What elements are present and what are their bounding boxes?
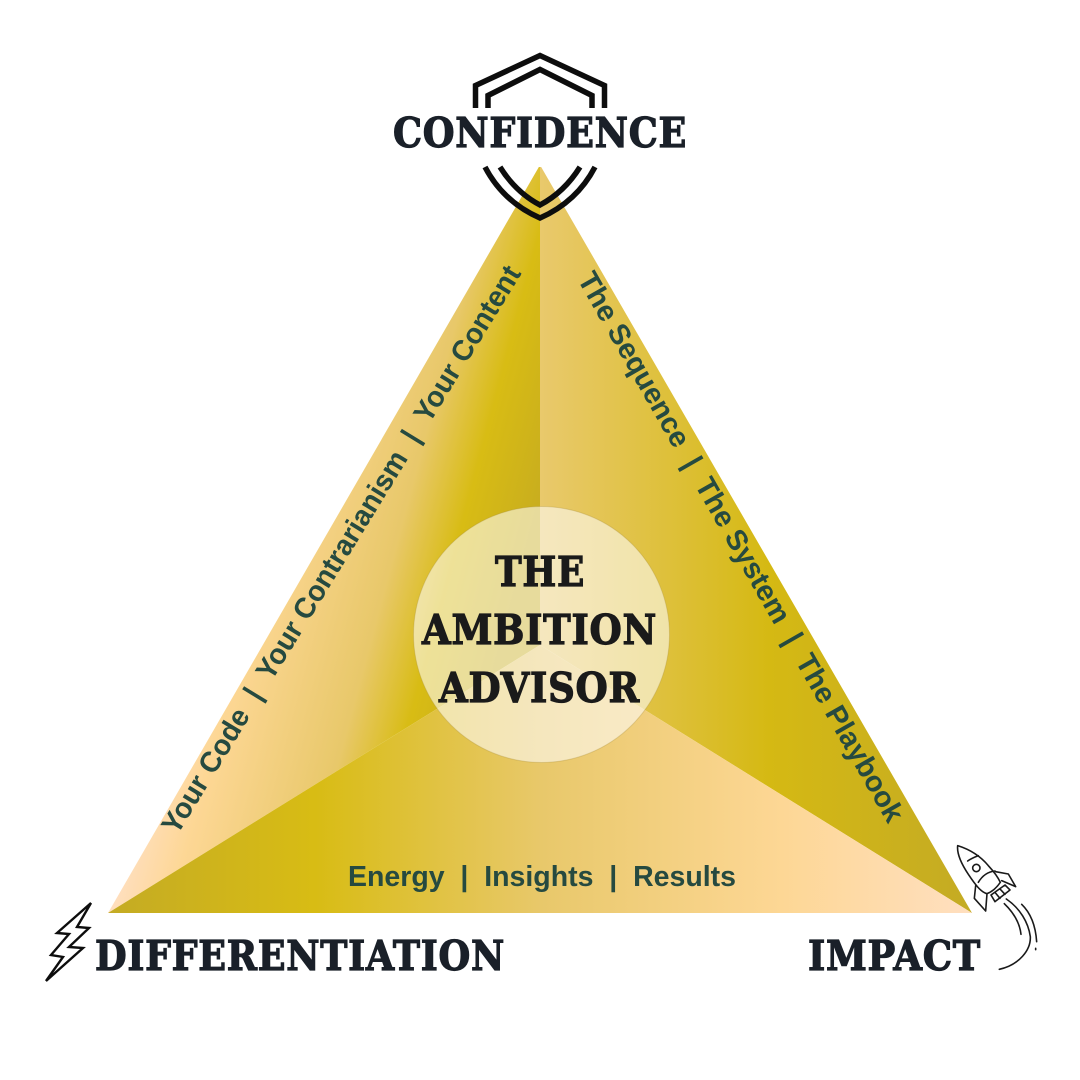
center title: THE bbox=[495, 548, 585, 596]
right face bbox=[540, 165, 972, 913]
center circle bbox=[414, 506, 670, 762]
pyramid triangle bbox=[108, 165, 972, 913]
heading: differentiation: DIFFERENTIATION bbox=[95, 932, 505, 980]
left face bbox=[108, 165, 540, 913]
label: left side: Your Code | Your Contrarianism | Your Content bbox=[156, 260, 528, 840]
center title bbox=[421, 548, 657, 712]
center title: ADVISOR bbox=[438, 664, 640, 712]
icon: rocket bbox=[958, 846, 1037, 969]
heading: impact: IMPACT bbox=[808, 932, 981, 980]
label: right side: The Sequence | The System | The Playbook bbox=[571, 267, 910, 829]
label: bottom side: Energy | Insights | Results bbox=[348, 861, 736, 893]
center title: AMBITION bbox=[421, 606, 657, 654]
heading: confidence: CONFIDENCE bbox=[393, 109, 687, 157]
icon: shield bbox=[476, 56, 604, 218]
bottom face bbox=[108, 645, 972, 913]
icon: lightning bolt bbox=[46, 903, 91, 981]
label panel: confidence backing bbox=[375, 108, 705, 167]
